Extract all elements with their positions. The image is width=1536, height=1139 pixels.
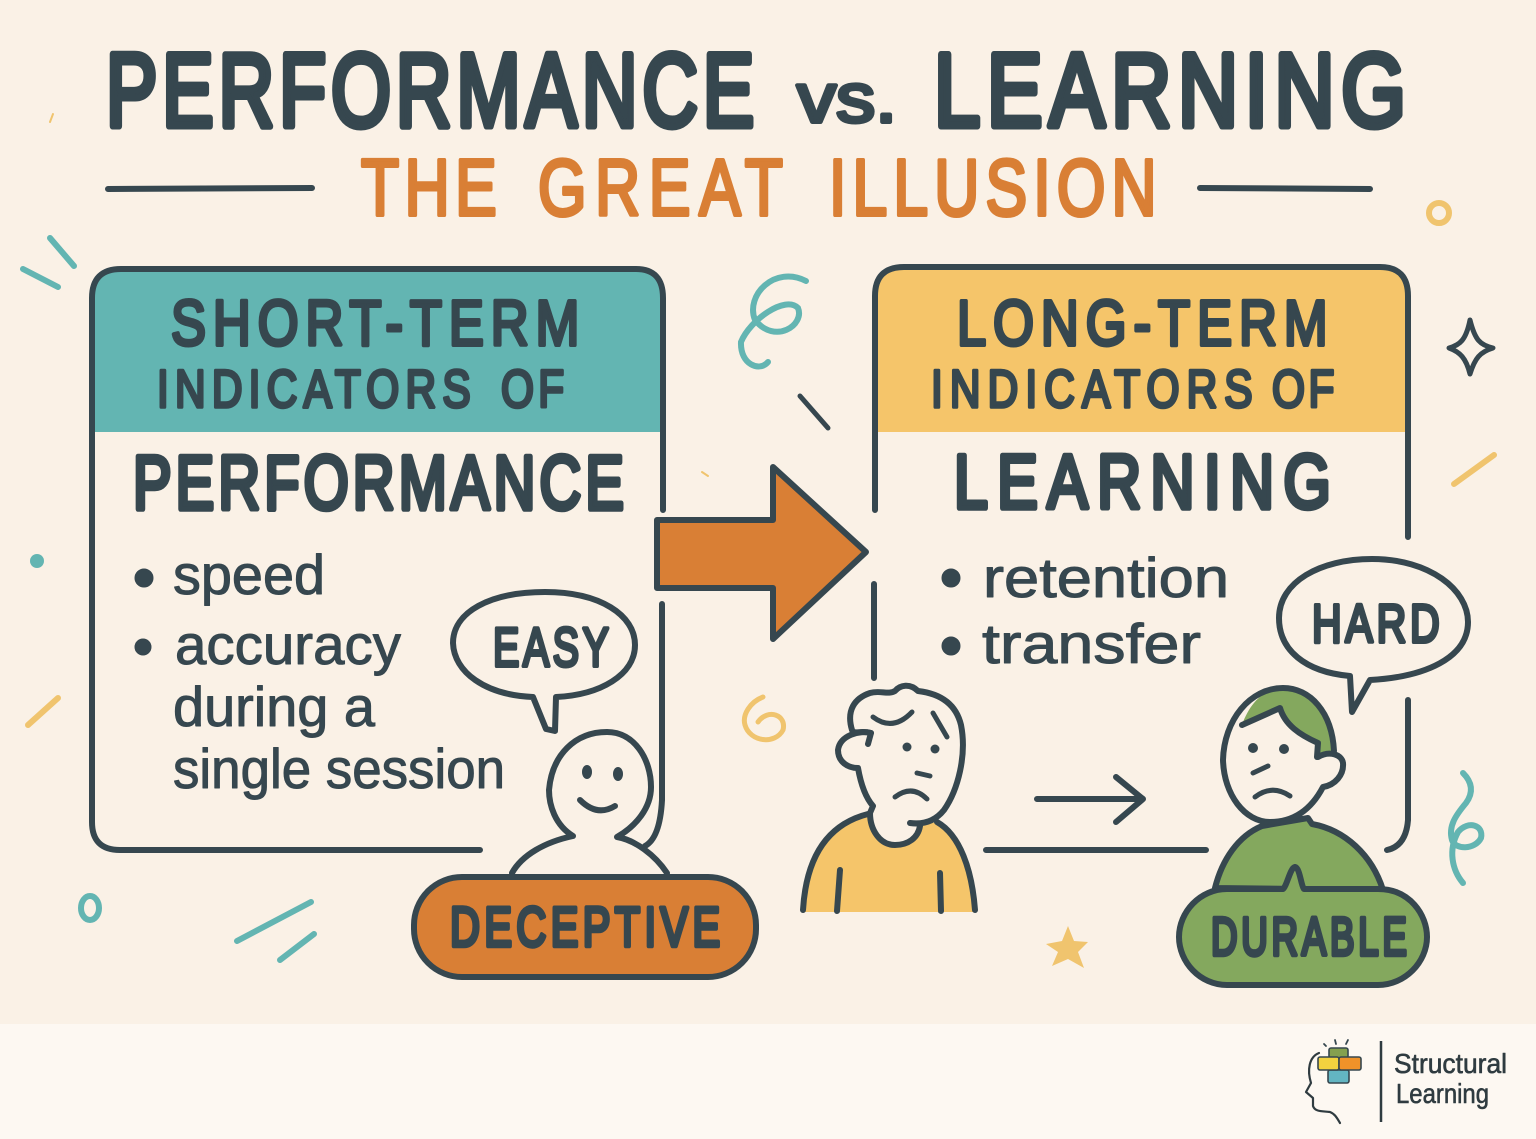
arrow: performance to learning (657, 467, 866, 639)
bullet list: single session (173, 737, 505, 800)
bullet list: retention (983, 546, 1229, 609)
title: LEARNING (934, 32, 1406, 148)
bullet list: during a (173, 675, 376, 738)
panel header: long-term: INDICATORS (931, 361, 1253, 419)
badge: durable (1179, 867, 1427, 985)
panel header: long-term: LONG-TERM (957, 288, 1328, 359)
badge: durable: DURABLE (1211, 906, 1407, 967)
panel: learning (874, 267, 1408, 850)
panel header: short-term: SHORT-TERM (171, 288, 579, 359)
subtitle: ILLUSION (829, 144, 1157, 233)
subtitle: THE (361, 144, 497, 233)
panel: performance (92, 269, 663, 850)
speech bubble: easy: EASY (493, 618, 609, 679)
panel header: short-term: OF (501, 361, 564, 419)
panel header: short-term (94, 271, 661, 432)
panel heading: PERFORMANCE (133, 441, 624, 526)
speech bubble: hard (1279, 559, 1468, 712)
logo: Structural Learning: Structural (1394, 1048, 1507, 1079)
speech bubble: easy (453, 592, 635, 731)
badge: deceptive (414, 877, 756, 977)
bullet list (942, 546, 1229, 675)
arrow: small right (1037, 777, 1143, 822)
figure: sad person, green shirt (1215, 688, 1383, 890)
logo: Structural Learning: Learning (1396, 1078, 1489, 1109)
subtitle: GREAT (538, 144, 783, 233)
panel header: long-term (877, 269, 1406, 432)
figure: happy person (512, 732, 667, 873)
bullet list: transfer (982, 612, 1201, 675)
panel outline (92, 269, 663, 850)
panel heading: LEARNING (954, 440, 1331, 525)
title: PERFORMANCE (106, 33, 754, 149)
badge: deceptive: DECEPTIVE (450, 896, 720, 959)
figure: worried person, yellow shirt (803, 686, 976, 912)
bullet list (135, 543, 505, 800)
logo: Structural Learning (1306, 1040, 1507, 1123)
icon: head with blocks (1306, 1040, 1361, 1123)
title (106, 32, 1406, 149)
panel header: short-term: INDICATORS (157, 361, 471, 419)
panel header: long-term: OF (1272, 361, 1334, 419)
speech bubble: hard: HARD (1312, 595, 1440, 654)
title: vs. (797, 59, 897, 137)
decorative doodles (23, 114, 1494, 968)
bullet list: speed (173, 543, 325, 606)
bullet list: accuracy (175, 613, 401, 676)
subtitle (108, 144, 1370, 233)
panel outline (874, 267, 1408, 850)
